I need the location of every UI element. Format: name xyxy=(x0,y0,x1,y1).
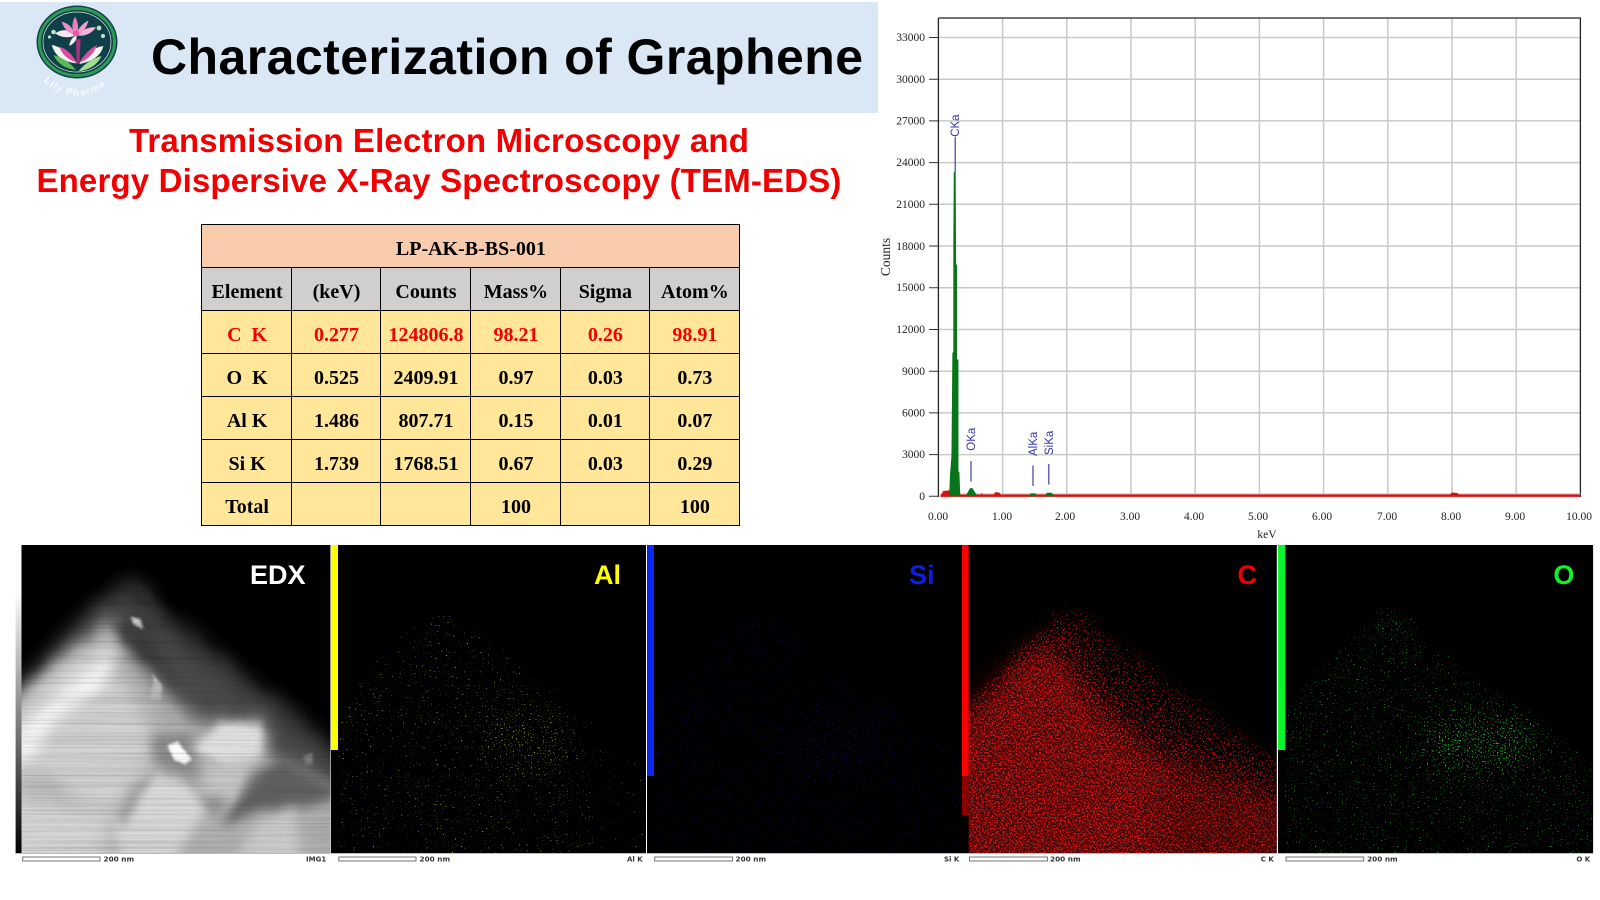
scale bar: 200 nm xyxy=(420,854,450,864)
panel label: Al: Al xyxy=(594,560,621,590)
table: elemental composition LP-AK-B-BS-001: 0.03 xyxy=(588,367,623,389)
table: elemental composition LP-AK-B-BS-001: 0.01 xyxy=(588,410,623,432)
scale bar xyxy=(647,853,963,864)
y axis labels: 30000 xyxy=(896,74,925,86)
x axis labels: 4.00 xyxy=(1184,511,1204,523)
scale bar: 200 nm xyxy=(1367,854,1398,864)
panel: Si map xyxy=(647,545,962,864)
y axis labels: 6000 xyxy=(902,408,925,420)
y axis labels: 9000 xyxy=(902,366,925,378)
scale bar: 200 nm xyxy=(104,854,134,864)
Si dots xyxy=(654,602,962,853)
intensity bar: blue xyxy=(647,545,654,776)
header band xyxy=(0,2,878,113)
table: elemental composition LP-AK-B-BS-001: 0.277 xyxy=(314,324,359,346)
table: elemental composition LP-AK-B-BS-001: Mass% xyxy=(484,281,548,303)
peak labels: AlKa xyxy=(1028,431,1040,456)
y axis labels xyxy=(896,32,925,503)
x axis labels: 2.00 xyxy=(1055,511,1075,523)
table: elemental composition LP-AK-B-BS-001: 0.29 xyxy=(677,453,712,475)
spectrum baseline xyxy=(940,493,1580,497)
map background xyxy=(647,545,962,853)
image background xyxy=(22,545,330,853)
panel: EDX grayscale image xyxy=(16,545,330,864)
x axis title: keV xyxy=(1257,529,1277,541)
table: elemental composition LP-AK-B-BS-001: 124806.8 xyxy=(388,324,463,346)
panel: Al map xyxy=(331,545,646,864)
table: elemental composition LP-AK-B-BS-001: 100 xyxy=(680,496,710,518)
y axis title: Counts xyxy=(878,238,893,276)
intensity bar: yellow xyxy=(331,545,338,750)
scale bar: Si K xyxy=(944,856,960,864)
x axis labels: 6.00 xyxy=(1312,511,1332,523)
scale bar: 200 nm xyxy=(736,854,766,864)
specimen xyxy=(22,572,330,853)
scale bar: C K xyxy=(1261,856,1274,864)
table: elemental composition LP-AK-B-BS-001: Total xyxy=(225,496,269,518)
grayscale strip xyxy=(16,590,22,853)
table: elemental composition LP-AK-B-BS-001: 98.21 xyxy=(493,324,538,346)
table: elemental composition LP-AK-B-BS-001: (keV) xyxy=(313,281,360,303)
table: elemental composition LP-AK-B-BS-001: 2409.91 xyxy=(393,367,458,389)
y axis labels: 27000 xyxy=(896,116,925,128)
subtitle: Transmission Electron Microscopy and xyxy=(129,122,749,159)
x axis labels: 1.00 xyxy=(992,511,1012,523)
y axis labels: 33000 xyxy=(896,32,925,44)
x axis labels xyxy=(928,511,1592,523)
map background xyxy=(1278,545,1593,853)
panel label: Si: Si xyxy=(909,560,935,590)
C dots xyxy=(968,600,1277,853)
y axis labels: 12000 xyxy=(896,324,925,336)
scale bar: IMG1 xyxy=(306,856,326,864)
x axis labels: 10.00 xyxy=(1566,511,1592,523)
y ticks xyxy=(929,38,938,496)
y axis labels: 24000 xyxy=(896,157,925,169)
table: elemental composition LP-AK-B-BS-001: C K xyxy=(227,324,267,346)
table: elemental composition LP-AK-B-BS-001: Atom% xyxy=(661,281,729,303)
table: elemental composition LP-AK-B-BS-001: 1768.51 xyxy=(393,453,458,475)
panel: C map xyxy=(962,545,1277,864)
scale bar: Al K xyxy=(627,856,643,864)
peak labels: CKa xyxy=(950,114,962,137)
x axis labels: 3.00 xyxy=(1120,511,1140,523)
scale bar xyxy=(962,853,1277,864)
scale bar xyxy=(16,853,330,864)
x axis labels: 9.00 xyxy=(1505,511,1525,523)
Al dots xyxy=(338,609,646,853)
panel label: C: C xyxy=(1238,560,1257,590)
scale bar: 200 nm xyxy=(1050,854,1081,864)
table: elemental composition LP-AK-B-BS-001: 0.15 xyxy=(498,410,533,432)
icon: Lily Pharma logo: Lily Pharma xyxy=(44,76,106,96)
map background xyxy=(331,545,646,853)
table: elemental composition LP-AK-B-BS-001: Counts xyxy=(395,281,457,303)
table: elemental composition LP-AK-B-BS-001 xyxy=(201,224,740,526)
x axis labels: 7.00 xyxy=(1377,511,1397,523)
table: elemental composition LP-AK-B-BS-001: 1.739 xyxy=(314,453,359,475)
table: elemental composition LP-AK-B-BS-001: Element xyxy=(212,281,283,303)
table: elemental composition LP-AK-B-BS-001: Al K xyxy=(227,410,267,432)
peak labels: OKa xyxy=(966,427,978,451)
spectrum peaks xyxy=(941,172,1461,496)
O dots xyxy=(1285,607,1594,853)
peak labels xyxy=(950,114,1056,456)
table: elemental composition LP-AK-B-BS-001: 0.97 xyxy=(498,367,533,389)
plot frame xyxy=(938,18,1580,497)
y axis labels: 18000 xyxy=(896,241,925,253)
table: elemental composition LP-AK-B-BS-001: Si K xyxy=(228,453,266,475)
table: elemental composition LP-AK-B-BS-001: 0.03 xyxy=(588,453,623,475)
table: elemental composition LP-AK-B-BS-001: 0.26 xyxy=(588,324,623,346)
panel: O map xyxy=(1278,545,1594,864)
scale bar: O K xyxy=(1576,856,1590,864)
table: elemental composition LP-AK-B-BS-001: Sigma xyxy=(579,281,632,303)
table: elemental composition LP-AK-B-BS-001: LP-AK-B-BS-001 xyxy=(396,238,546,260)
table: elemental composition LP-AK-B-BS-001: 1.486 xyxy=(314,410,359,432)
subtitle: Energy Dispersive X-Ray Spectroscopy (TEM-EDS) xyxy=(36,162,842,199)
table: elemental composition LP-AK-B-BS-001: O K xyxy=(227,367,268,389)
y axis labels: 0 xyxy=(919,491,925,503)
y axis labels: 21000 xyxy=(896,199,925,211)
intensity bar: green xyxy=(1278,545,1285,750)
peak labels: SiKa xyxy=(1044,430,1056,455)
x axis labels: 0.00 xyxy=(928,511,948,523)
y axis labels: 15000 xyxy=(896,282,925,294)
table: elemental composition LP-AK-B-BS-001: 807.71 xyxy=(398,410,453,432)
y axis labels: 3000 xyxy=(902,449,925,461)
panel label: O: O xyxy=(1553,560,1574,590)
panel label: EDX: EDX xyxy=(250,560,306,590)
scale bar xyxy=(1278,853,1593,864)
table: elemental composition LP-AK-B-BS-001: 98.91 xyxy=(672,324,717,346)
map background xyxy=(962,545,1277,853)
table: elemental composition LP-AK-B-BS-001: 100 xyxy=(501,496,531,518)
chart: EDS spectrum xyxy=(878,17,1592,541)
x axis labels: 8.00 xyxy=(1441,511,1461,523)
x axis labels: 5.00 xyxy=(1248,511,1268,523)
peak markers xyxy=(955,137,1049,486)
icon: Lily Pharma logo xyxy=(36,6,118,96)
table: elemental composition LP-AK-B-BS-001: 0.67 xyxy=(498,453,533,475)
scale bar xyxy=(331,853,646,864)
table: elemental composition LP-AK-B-BS-001: 0.73 xyxy=(677,367,712,389)
table: elemental composition LP-AK-B-BS-001: 0.525 xyxy=(314,367,359,389)
subtitle xyxy=(36,122,842,199)
scan line texture xyxy=(22,616,330,853)
header background xyxy=(0,2,878,113)
table: elemental composition LP-AK-B-BS-001: 0.07 xyxy=(677,410,712,432)
title: Characterization of Graphene xyxy=(151,29,863,85)
intensity bar: red xyxy=(962,545,969,815)
